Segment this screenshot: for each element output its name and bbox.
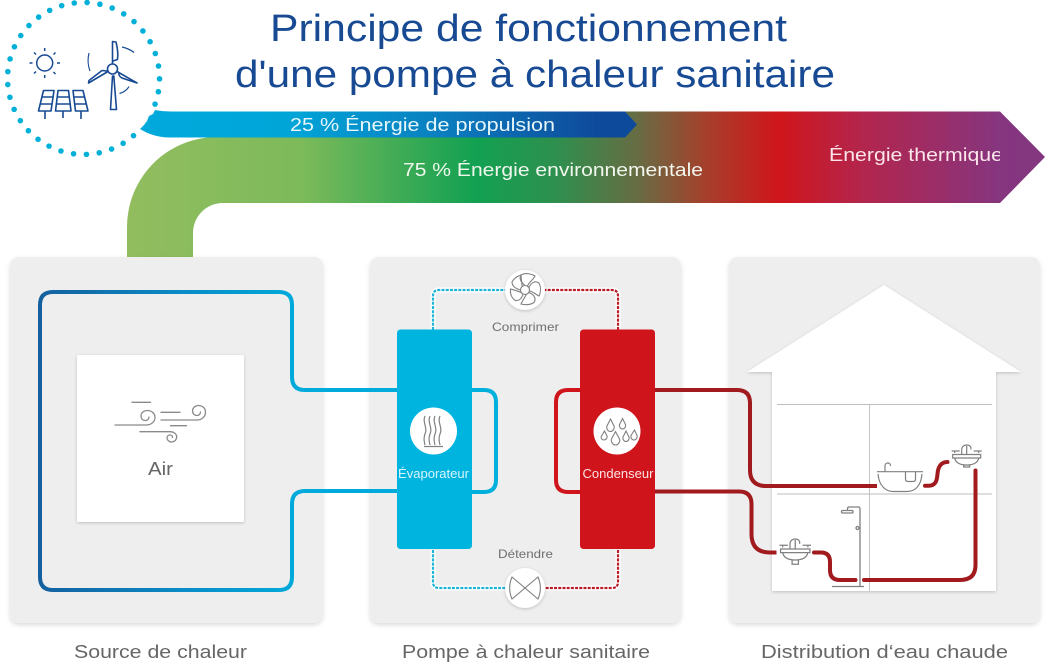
panel: pompe a chaleur	[370, 257, 681, 623]
panel: distribution eau chaude	[729, 257, 1040, 623]
label: air: Air	[148, 459, 173, 479]
icon: expansion valve	[505, 568, 545, 608]
panel: source de chaleur	[10, 257, 323, 623]
condenser internal loop	[556, 390, 582, 492]
label: environnementale: 75 % Énergie environnementale	[403, 160, 703, 180]
label: detendre: Détendre	[498, 547, 553, 561]
icon: heat waves	[410, 408, 457, 454]
icon: wind	[115, 402, 206, 442]
icon: lower sink	[780, 539, 811, 564]
title	[235, 8, 835, 96]
evaporator	[397, 330, 472, 549]
icon: sun	[30, 48, 60, 78]
dashed refrigerant circuit	[433, 290, 618, 588]
dotted circle	[8, 2, 160, 154]
icon: shower	[832, 507, 864, 586]
arrow: energie environnementale and energie thermique	[127, 112, 1045, 257]
label: source de chaleur: Source de chaleur	[74, 642, 247, 662]
label: evaporateur: Évaporateur	[398, 466, 469, 481]
icon: wind turbine	[88, 42, 137, 110]
renewable energy circle with icons	[8, 2, 160, 154]
heat source loop pipe	[40, 292, 397, 590]
condenser	[580, 330, 655, 549]
icon: upper sink	[952, 445, 982, 467]
label: propulsion: 25 % Énergie de propulsion	[290, 115, 555, 135]
hot water pipes	[655, 390, 976, 580]
arrow: energie de propulsion	[140, 110, 637, 138]
evaporator internal loop	[470, 390, 496, 492]
icon: water drops	[594, 408, 640, 454]
label: distribution eau chaude: Distribution d‘eau chaude	[761, 642, 1008, 662]
house floors	[777, 404, 992, 591]
label: thermique: Énergie thermique	[829, 145, 1003, 165]
label: comprimer: Comprimer	[492, 320, 559, 334]
label: condenseur: Condenseur	[582, 467, 654, 481]
title: d'une pompe à chaleur sanitaire	[235, 54, 835, 96]
icon: compressor fan	[505, 270, 545, 310]
title: Principe de fonctionnement	[270, 8, 787, 50]
icon: solar panels	[38, 90, 88, 119]
air card	[77, 355, 244, 522]
label: pompe a chaleur sanitaire: Pompe à chaleur sanitaire	[402, 642, 650, 662]
icon: bathtub	[877, 463, 923, 492]
house	[747, 285, 1021, 591]
